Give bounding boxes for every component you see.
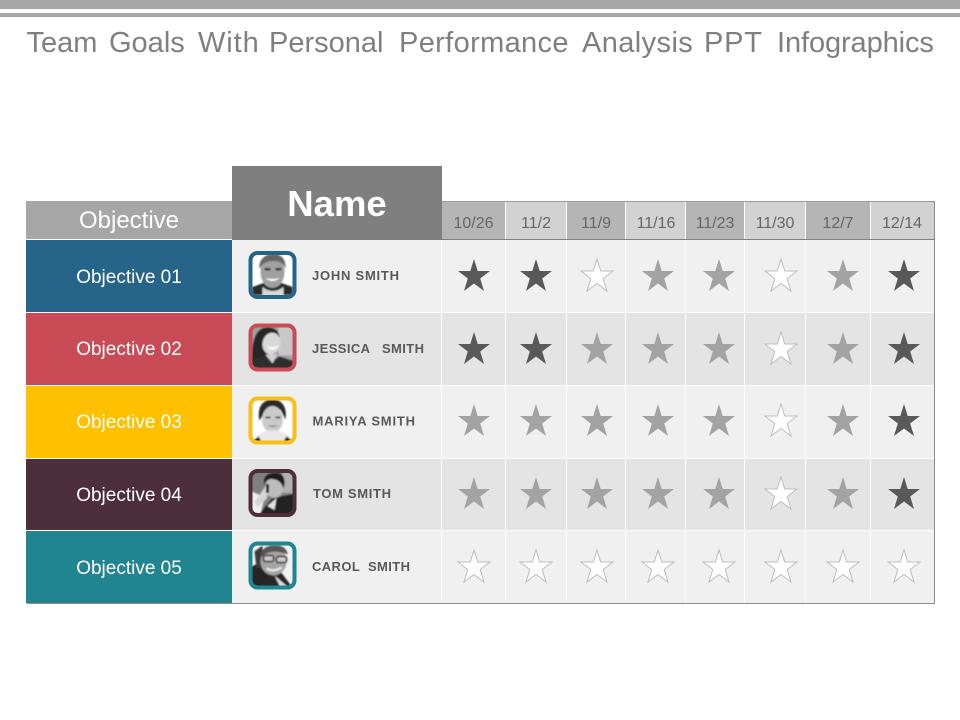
star ratings: row 4 (458, 477, 920, 509)
header: dates: 12/14 (882, 215, 922, 232)
header: dates: 11/30 (756, 215, 795, 232)
title: Performance (399, 27, 577, 59)
portrait: Tom Smith (248, 469, 296, 517)
name: Tom Smith: TOM SMITH (313, 486, 391, 501)
title: Team (26, 27, 105, 59)
objective 02 (26, 313, 232, 385)
star ratings: row 2 (458, 332, 920, 364)
header: dates: 10/26 (453, 215, 494, 232)
header: dates: 12/7 (822, 215, 854, 232)
header: dates: 11/23 (696, 215, 735, 232)
header: dates: 11/16 (637, 215, 676, 232)
objective 02: Objective 02 (76, 339, 182, 360)
title: Infographics (777, 27, 934, 59)
objective 01: Objective 01 (76, 267, 182, 288)
objective 05: Objective 05 (76, 558, 182, 579)
title: With (198, 27, 269, 59)
name: Jessica Smith: JESSICA SMITH (312, 341, 424, 356)
star ratings: row 3 (458, 404, 920, 436)
header: dates: 11/9 (581, 215, 611, 232)
top double rule (0, 0, 960, 17)
header: objective: Objective (79, 207, 179, 234)
header: name tab (232, 166, 442, 240)
table background and row stripes (27, 201, 935, 604)
name: Carol Smith: CAROL SMITH (312, 559, 410, 574)
star ratings: row 5 (458, 550, 920, 582)
portrait: Carol Smith (248, 542, 296, 590)
name: Mariya Smith: MARIYA SMITH (312, 414, 415, 428)
title: Personal (269, 27, 392, 59)
star ratings: row 1 (458, 259, 920, 291)
title: PPT (704, 27, 771, 59)
objective 04: Objective 04 (76, 485, 182, 506)
objective 05 (26, 531, 232, 603)
portrait: Mariya Smith (248, 396, 296, 444)
objective 03 (26, 386, 232, 458)
objective 03: Objective 03 (76, 412, 182, 433)
header: objective (26, 201, 232, 239)
header: dates: 11/2 (521, 215, 551, 232)
objective 04 (26, 459, 232, 530)
portrait: John Smith (248, 251, 296, 299)
title: Goals (109, 27, 193, 59)
header: dates (442, 201, 935, 240)
portrait: Jessica Smith (248, 324, 296, 372)
objective 01 (26, 240, 232, 312)
name: John Smith: JOHN SMITH (312, 268, 399, 283)
header: name tab: Name (287, 183, 387, 224)
title: Analysis (582, 27, 702, 59)
